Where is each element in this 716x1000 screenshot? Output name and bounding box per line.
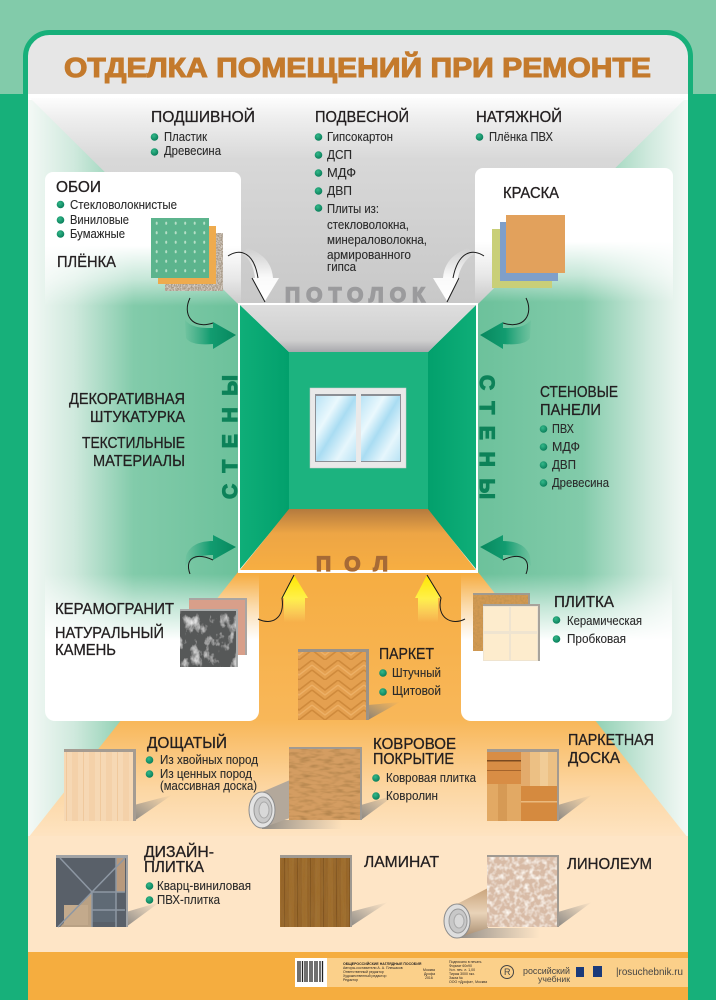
- arrow: green to wall top left: [185, 298, 236, 349]
- text: wall materials left: МАТЕРИАЛЫ: [93, 453, 185, 470]
- ceiling types: подшивной: [151, 108, 255, 158]
- ceiling types: подвесной: армированного: [327, 248, 411, 262]
- text: дощатый: (массивная доска): [160, 779, 257, 793]
- room back wall: [289, 352, 428, 510]
- text: ковровое покрытие: [372, 736, 476, 803]
- arrow: green to wall bottom right: [480, 535, 531, 574]
- text: wall materials left: ДЕКОРАТИВНАЯ: [69, 391, 185, 408]
- text: wall panels right: ПВХ: [552, 422, 575, 436]
- text: wall panels right: Древесина: [552, 476, 609, 490]
- publisher logos: учебник: [538, 975, 571, 984]
- text: паркет: Штучный: [392, 666, 441, 680]
- ceiling types: подвесной: стекловолокна,: [327, 218, 409, 232]
- imprint text: Авторы-составители А. А. Плешаков: [343, 966, 403, 970]
- swatches: tile samples: [473, 593, 540, 661]
- text: паркет: ПАРКЕТ: [379, 646, 434, 663]
- text: дизайн-плитка: ДИЗАЙН-: [144, 843, 214, 861]
- swatch: plank floor: [64, 749, 172, 821]
- arrow: yellow to floor left: [258, 575, 308, 622]
- wallpaper text block: Бумажные: [70, 227, 125, 241]
- panel: floor trapezoid: [28, 572, 688, 953]
- swatch: parquet: [298, 649, 400, 720]
- footer band: [28, 952, 688, 1000]
- label: стены left: СТЕНЫ: [219, 375, 242, 499]
- text: ковровое покрытие: КОВРОВОЕ: [373, 736, 456, 753]
- title: ОТДЕЛКА ПОМЕЩЕНИЙ ПРИ РЕМОНТЕ: [64, 51, 651, 83]
- header band with green rounded border: [26, 32, 690, 94]
- swatch: parquet board: [487, 749, 592, 821]
- panel: white card top right: [475, 168, 673, 302]
- imprint text: Художественный редактор: [343, 974, 386, 978]
- text: ламинат: ЛАМИНАТ: [364, 854, 440, 871]
- ceiling types: подшивной: Пластик: [164, 130, 207, 144]
- ceiling types: натяжной: НАТЯЖНОЙ: [476, 108, 562, 126]
- ceiling types: подвесной: гипса: [327, 260, 356, 274]
- label: пол: ПОЛ: [316, 553, 388, 576]
- wallpaper text block: Стекловолокнистые: [70, 198, 177, 212]
- text: керамогранит и камень: [55, 601, 175, 659]
- text: керамогранит и камень: НАТУРАЛЬНЫЙ: [55, 624, 164, 642]
- room left wall: [240, 305, 289, 569]
- swatches: stone samples: [180, 598, 247, 667]
- swatch: carpet with roll: [249, 747, 395, 829]
- ceiling types: подвесной: [315, 108, 427, 274]
- publisher logos: [500, 966, 602, 984]
- text: wall materials left: ТЕКСТИЛЬНЫЕ: [82, 435, 185, 452]
- text: керамогранит и камень: КАМЕНЬ: [55, 642, 116, 659]
- arrow: white to ceiling left: [228, 248, 279, 302]
- swatch: design tile: [56, 855, 160, 927]
- room right wall: [428, 305, 476, 569]
- wallpaper text block: ОБОИ: [56, 179, 101, 196]
- ceiling types: подвесной: ДВП: [327, 184, 352, 198]
- publisher logos: R: [504, 967, 511, 977]
- text: дизайн-плитка: Кварц-виниловая: [157, 879, 251, 893]
- imprint text: Дрофа: [424, 972, 435, 976]
- arrow: green to wall bottom left: [185, 535, 236, 574]
- imprint text: ООО «Дрофа», Москва: [449, 980, 487, 984]
- text: ковровое покрытие: Ковровая плитка: [386, 771, 476, 785]
- text: дизайн-плитка: ПВХ-плитка: [157, 893, 220, 907]
- text: паркет: Щитовой: [392, 684, 441, 698]
- room: frame with walls, ceiling and floor: [238, 303, 478, 573]
- ceiling types: подвесной: ДСП: [327, 148, 352, 162]
- panel: white card top left: [45, 172, 241, 306]
- text: паркетная доска: ДОСКА: [568, 750, 621, 767]
- text: паркет: [379, 646, 441, 698]
- arrow: green to wall top right: [480, 298, 531, 349]
- text: линолеум: ЛИНОЛЕУМ: [567, 856, 652, 873]
- text: ковровое покрытие: Ковролин: [386, 789, 438, 803]
- text: wall materials left: ШТУКАТУРКА: [90, 409, 186, 426]
- swatches: paint samples: [492, 215, 565, 288]
- text: паркетная доска: [568, 732, 654, 767]
- imprint text: Москва: [423, 968, 435, 972]
- imprint text: Тираж 3000 экз.: [449, 972, 475, 976]
- room ceiling: [240, 305, 476, 352]
- room floor: [240, 509, 476, 570]
- imprint text: Подписано в печать: [449, 960, 482, 964]
- ceiling types: подвесной: Плиты из:: [327, 202, 379, 216]
- swatches: wallpaper samples: [151, 218, 223, 291]
- imprint text: [343, 960, 487, 984]
- ceiling types: натяжной: Плёнка ПВХ: [489, 130, 554, 144]
- arrow: yellow to floor right: [415, 575, 465, 622]
- window: [310, 388, 406, 468]
- swatch: linoleum with roll: [444, 855, 592, 938]
- arrow: white to ceiling right: [433, 248, 484, 302]
- wallpaper text block: ПЛЁНКА: [57, 254, 117, 271]
- wallpaper text block: Виниловые: [70, 213, 129, 227]
- text: ковровое покрытие: ПОКРЫТИЕ: [373, 751, 454, 768]
- text: дизайн-плитка: [144, 843, 251, 907]
- text: wall panels right: ДВП: [552, 458, 576, 472]
- text: wall panels right: ПАНЕЛИ: [540, 402, 601, 419]
- panel: walls backdrop: [28, 94, 688, 854]
- text: wall panels right: МДФ: [552, 440, 580, 454]
- label: краска: КРАСКА: [503, 185, 560, 202]
- imprint strip: [295, 958, 688, 987]
- imprint text: Усл. печ. л. 1,00: [449, 968, 475, 972]
- imprint text: Формат 60х90: [449, 964, 472, 968]
- barcode: [295, 958, 327, 987]
- panel: ceiling trapezoid: [30, 98, 686, 304]
- text: wall materials left: [69, 391, 186, 470]
- text: керамогранит и камень: КЕРАМОГРАНИТ: [55, 601, 175, 618]
- text: дощатый: [146, 734, 259, 793]
- ceiling types: подвесной: МДФ: [327, 166, 356, 180]
- swatch: laminate: [280, 855, 388, 927]
- ceiling types: подвесной: минераловолокна,: [327, 233, 427, 247]
- label: потолок: ПОТОЛОК: [285, 284, 425, 307]
- imprint text: Редактор: [343, 978, 358, 982]
- panel: white card bottom left: [45, 574, 259, 721]
- ceiling types: подшивной: ПОДШИВНОЙ: [151, 108, 255, 126]
- text: wall panels right: СТЕНОВЫЕ: [540, 384, 618, 401]
- text: паркетная доска: ПАРКЕТНАЯ: [568, 732, 654, 749]
- text: плитка: Керамическая: [567, 614, 642, 628]
- label: стены right: СТЕНЫ: [475, 375, 498, 499]
- website: |rosuchebnik.ru: [616, 966, 683, 978]
- text: дизайн-плитка: ПЛИТКА: [144, 859, 205, 876]
- wallpaper text block: [56, 179, 177, 271]
- text: плитка: Пробковая: [567, 632, 626, 646]
- imprint text: Заказ №: [449, 976, 463, 980]
- ceiling types: подвесной: ПОДВЕСНОЙ: [315, 108, 409, 126]
- ceiling types: натяжной: [476, 108, 562, 144]
- imprint text: ОБЩЕРОССИЙСКИЕ НАГЛЯДНЫЕ ПОСОБИЯ: [343, 962, 422, 966]
- ceiling types: подшивной: Древесина: [164, 144, 221, 158]
- text: wall panels right: [540, 384, 618, 490]
- ceiling types: подвесной: Гипсокартон: [327, 130, 393, 144]
- text: дощатый: Из хвойных пород: [160, 753, 259, 767]
- text: плитка: [553, 594, 642, 646]
- text: дощатый: ДОЩАТЫЙ: [147, 734, 227, 752]
- publisher logos: российский: [523, 966, 570, 976]
- panel: white card bottom right: [461, 574, 672, 721]
- imprint text: 2016: [425, 976, 433, 980]
- text: дощатый: Из ценных пород: [160, 767, 253, 781]
- text: плитка: ПЛИТКА: [554, 594, 615, 611]
- imprint text: Ответственный редактор: [343, 970, 384, 974]
